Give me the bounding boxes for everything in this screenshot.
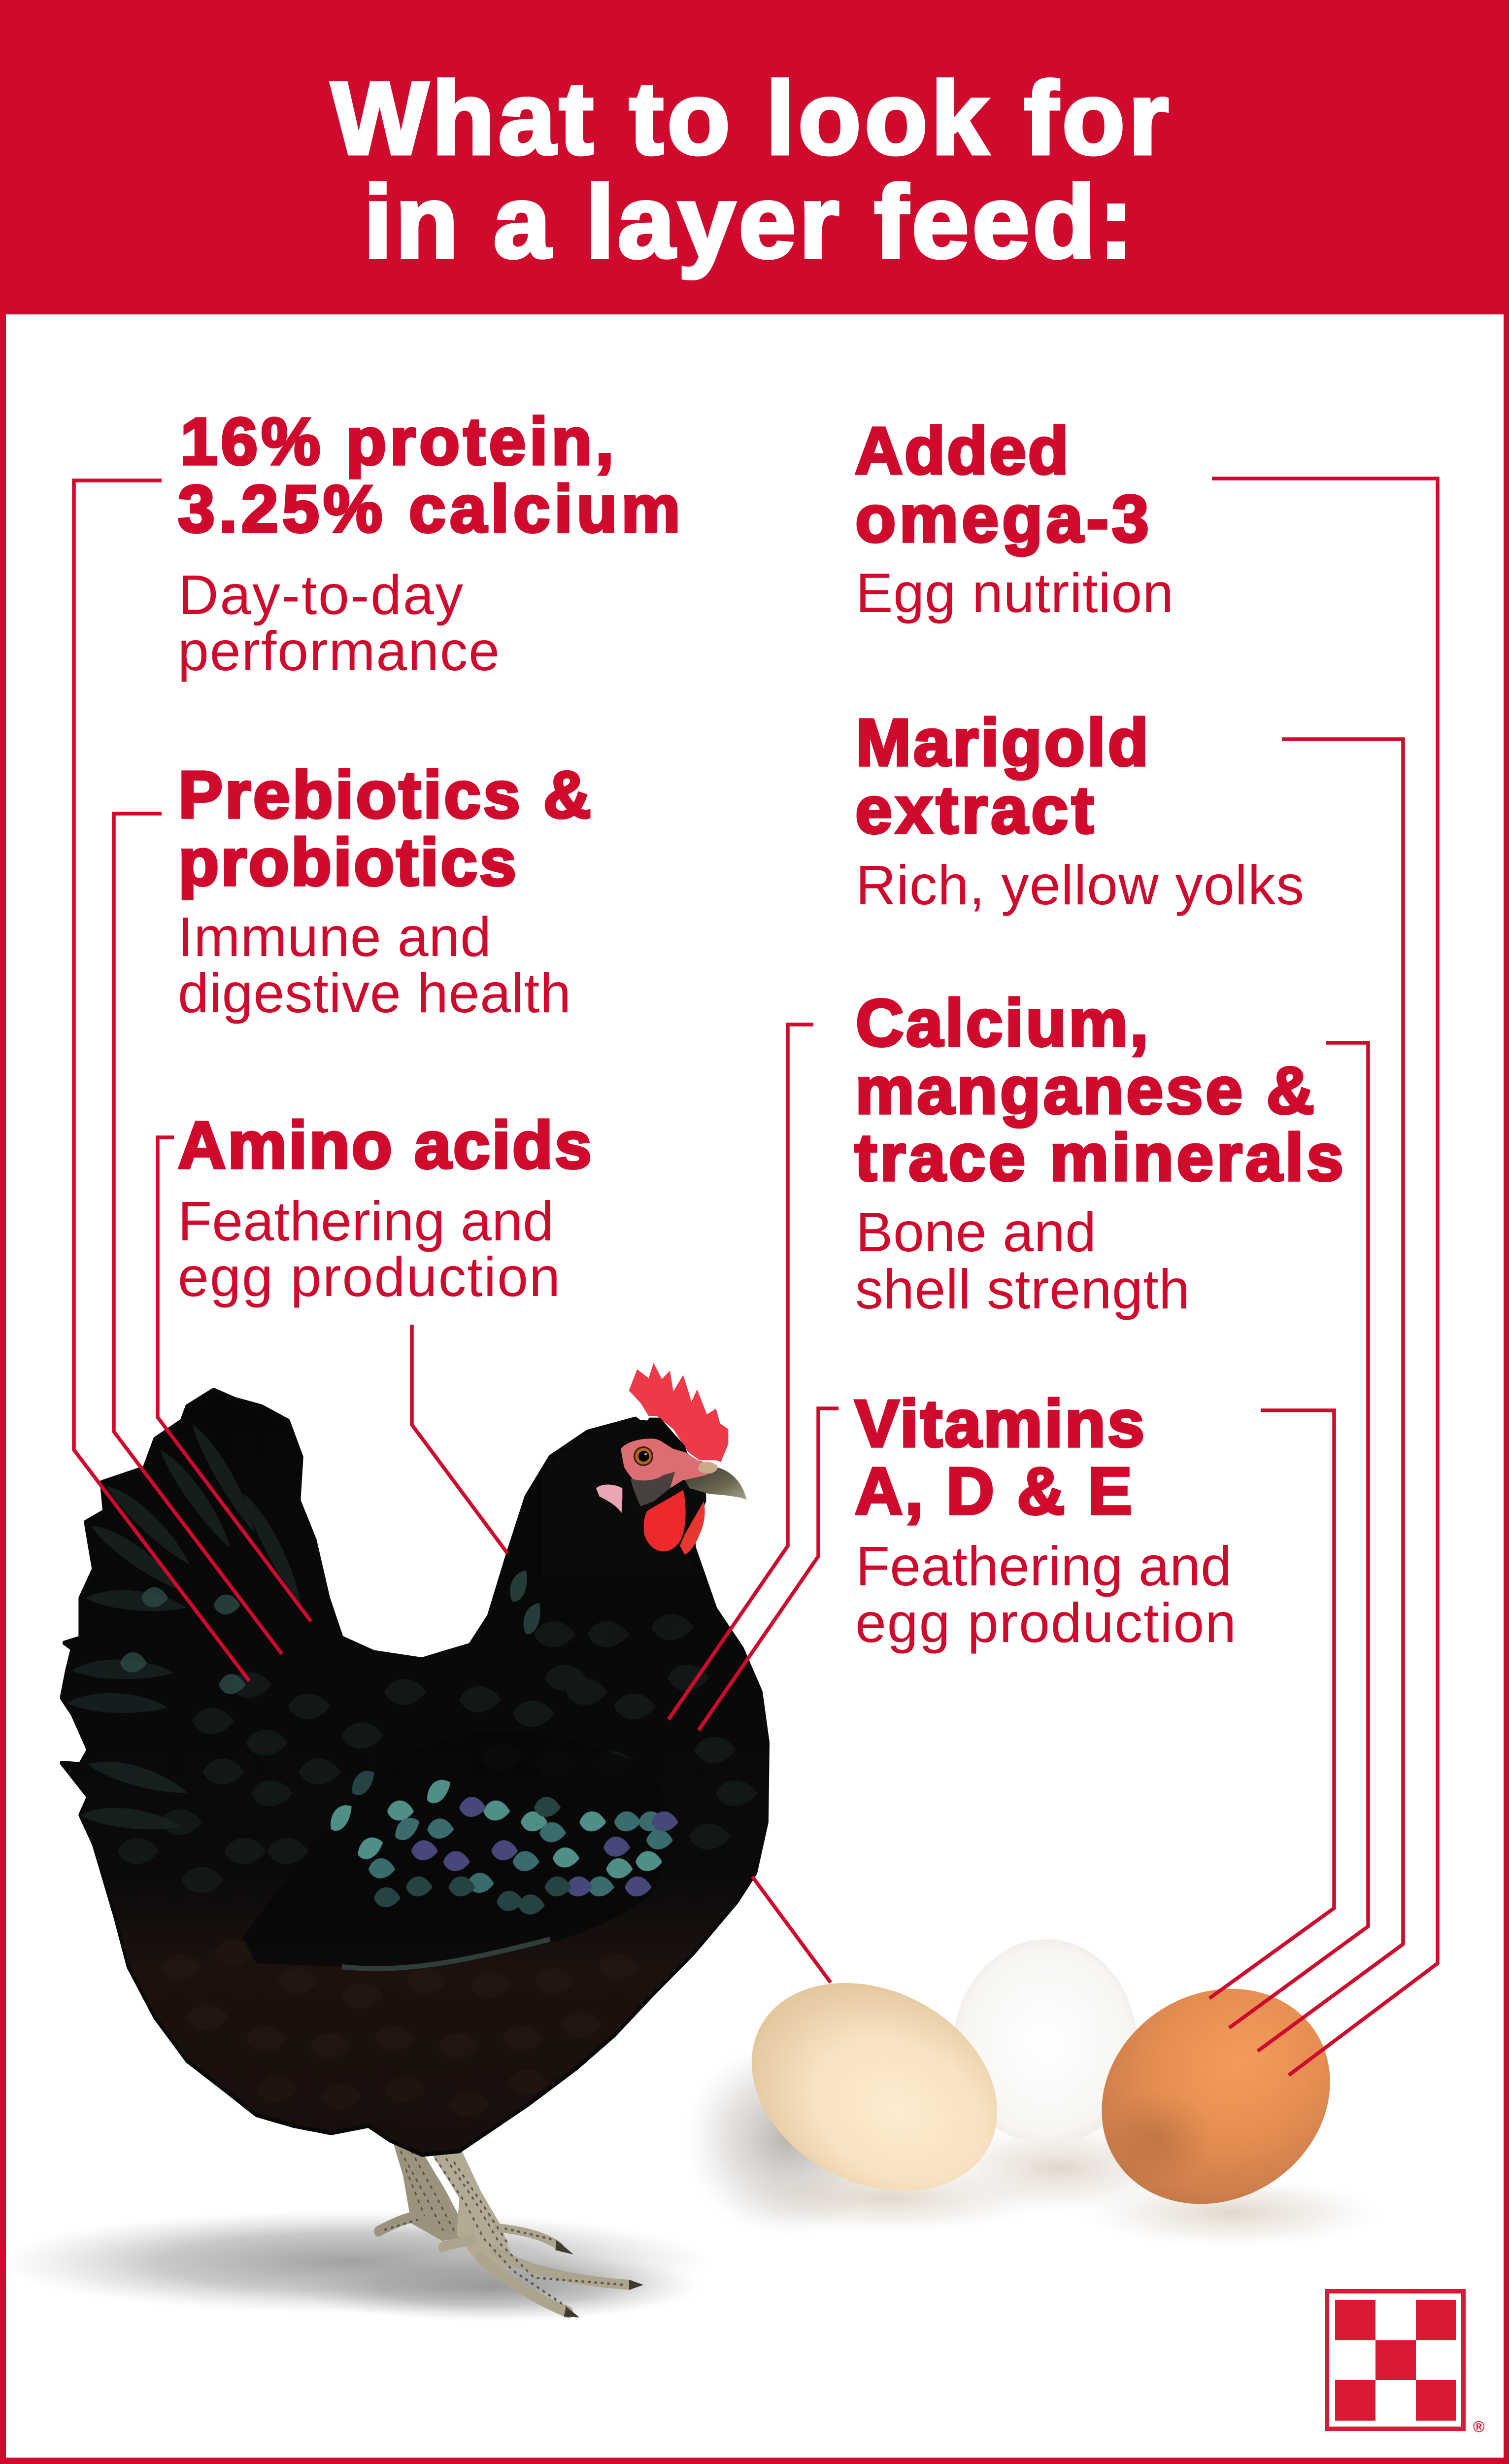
callout: vitamins: egg production	[855, 1592, 1236, 1654]
neck highlights	[120, 1539, 566, 1694]
brown egg	[1061, 1946, 1371, 2247]
callout: omega-3: Added	[855, 413, 1069, 488]
title	[331, 61, 1169, 279]
callout: prebiotics and probiotics: Immune and	[178, 906, 491, 968]
callout: protein and calcium: performance	[178, 620, 500, 682]
callout: vitamins: Vitamins	[855, 1386, 1144, 1461]
callout: protein and calcium: 3.25% calcium	[178, 472, 680, 546]
iridescent wing feathers	[326, 1764, 678, 1915]
wing shape	[243, 1732, 668, 1967]
callout: protein and calcium	[178, 404, 680, 682]
callout: amino acids: Amino acids	[178, 1108, 592, 1182]
white egg	[954, 1939, 1138, 2143]
callout: prebiotics and probiotics: Prebiotics &	[178, 757, 591, 832]
callout leader lines	[74, 479, 1438, 2075]
callout: marigold extract: Marigold	[856, 705, 1148, 780]
callout: vitamins: A, D & E	[855, 1454, 1132, 1528]
brow	[621, 1418, 687, 1453]
ear lobe	[596, 1484, 622, 1513]
callout: omega-3: omega-3	[855, 481, 1149, 556]
logo: checkerboard	[1327, 2292, 1485, 2435]
eggs	[716, 1939, 1371, 2247]
hen and egg ground shadows	[0, 2040, 1379, 2321]
head cap	[542, 1420, 706, 1577]
hen illustration	[62, 1363, 768, 2317]
callout: marigold extract: Rich, yellow yolks	[856, 854, 1304, 916]
hen legs and feet	[378, 2140, 643, 2317]
eye	[634, 1446, 653, 1466]
beak	[685, 1467, 747, 1500]
comb	[629, 1363, 728, 1462]
callout: omega-3	[855, 413, 1174, 624]
callout: calcium, manganese and trace minerals	[855, 986, 1343, 1320]
hen head with comb and wattle	[542, 1363, 747, 1577]
upper body scale feathers	[117, 1614, 757, 1893]
callout: prebiotics and probiotics	[178, 757, 591, 1024]
callout: calcium, manganese and trace minerals: manganese &	[855, 1053, 1314, 1128]
title: What to look for	[331, 61, 1169, 176]
tail feathers	[67, 1417, 308, 1835]
callout: amino acids: egg production	[178, 1246, 560, 1308]
callout: marigold extract: extract	[855, 773, 1094, 847]
hen body silhouette	[62, 1390, 768, 2155]
title: in a layer feed:	[364, 165, 1133, 279]
logo: checkerboard: ®	[1473, 2418, 1485, 2435]
callout: prebiotics and probiotics: probiotics	[178, 825, 516, 899]
cream egg	[716, 1942, 1033, 2232]
callout: calcium, manganese and trace minerals: shell strength	[855, 1258, 1190, 1320]
callout: amino acids	[178, 1108, 592, 1308]
callout: vitamins: Feathering and	[856, 1535, 1232, 1597]
callout: prebiotics and probiotics: digestive health	[178, 962, 571, 1024]
callout: omega-3: Egg nutrition	[856, 562, 1174, 624]
callout: vitamins	[855, 1386, 1236, 1654]
callout: calcium, manganese and trace minerals: trace minerals	[855, 1120, 1343, 1195]
callout: protein and calcium: Day-to-day	[178, 564, 463, 626]
leg scale speckle	[384, 2151, 625, 2306]
callout: calcium, manganese and trace minerals: Calcium,	[856, 986, 1148, 1060]
wattle	[644, 1490, 686, 1551]
callout: protein and calcium: 16% protein,	[180, 404, 614, 479]
face	[621, 1438, 718, 1495]
callout: calcium, manganese and trace minerals: Bone and	[856, 1201, 1096, 1263]
belly feathers	[160, 1939, 640, 2117]
callout: marigold extract	[855, 705, 1304, 916]
callout: amino acids: Feathering and	[178, 1190, 554, 1252]
